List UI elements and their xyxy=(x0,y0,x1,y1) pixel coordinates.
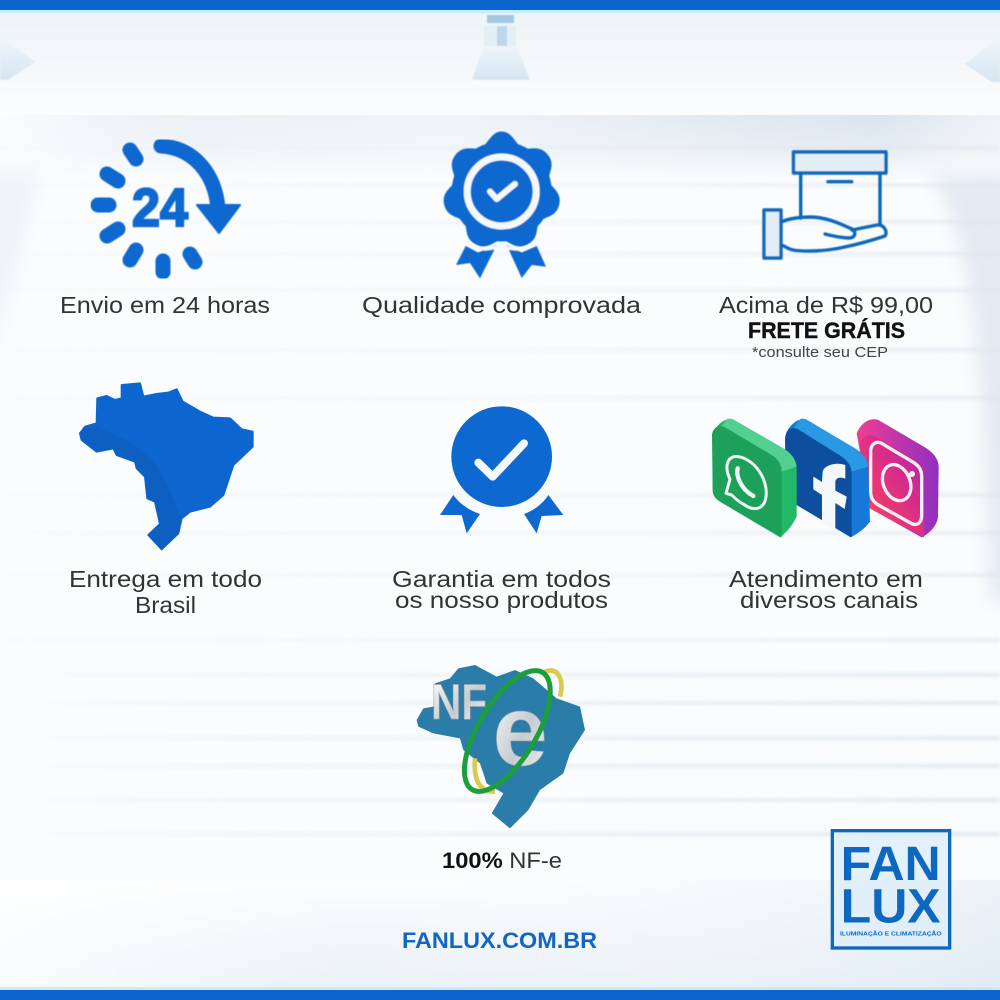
icon: NF-e seal: NF xyxy=(431,674,487,730)
ceiling lamp right xyxy=(965,40,1000,82)
icon: 24 hours xyxy=(98,146,240,272)
label: entrega: Brasil xyxy=(135,592,196,618)
label: frete xyxy=(719,292,933,361)
label: frete: *consulte seu CEP xyxy=(752,344,888,361)
icon: social channels xyxy=(712,419,939,537)
label: atendimento xyxy=(729,566,923,613)
label: garantia: Garantia em todos xyxy=(392,566,611,592)
label: envio: Envio em 24 horas xyxy=(60,292,270,318)
ceiling lamp left xyxy=(0,40,35,80)
label: entrega: Entrega em todo xyxy=(69,566,262,592)
icon: NF-e seal xyxy=(417,658,585,828)
label: frete: Acima de R$ 99,00 xyxy=(719,292,933,318)
label: garantia: os nosso produtos xyxy=(395,587,608,613)
icon: hand holding box xyxy=(764,152,886,258)
logo: Fanlux: ILUMINAÇÃO E CLIMATIZAÇÃO xyxy=(840,930,942,937)
icon: NF-e seal: e xyxy=(493,675,548,787)
label: atendimento: diversos canais xyxy=(740,587,918,613)
label: garantia xyxy=(392,566,611,613)
label: nf-e: 100% NF-e xyxy=(442,848,562,873)
icon: 24 hours: 24 xyxy=(132,178,188,238)
label: atendimento: Atendimento em xyxy=(729,566,923,592)
icon: whatsapp xyxy=(712,419,797,537)
icon: instagram xyxy=(857,419,939,537)
label: qualidade: Qualidade comprovada xyxy=(362,292,641,318)
top bar xyxy=(0,0,1000,10)
website: FANLUX.COM.BR xyxy=(402,928,597,953)
icon: facebook xyxy=(785,419,870,537)
label: frete: FRETE GRÁTIS xyxy=(748,318,905,343)
logo: Fanlux xyxy=(832,831,950,948)
bottom bar xyxy=(0,990,1000,1000)
icon: quality badge xyxy=(440,132,564,278)
logo: Fanlux: FAN xyxy=(841,837,941,891)
label: entrega xyxy=(69,566,262,618)
logo: Fanlux: LUX xyxy=(841,880,941,934)
icon: Brazil map xyxy=(80,383,253,549)
ceiling lamp center xyxy=(472,15,530,80)
icon: warranty seal xyxy=(440,406,563,533)
